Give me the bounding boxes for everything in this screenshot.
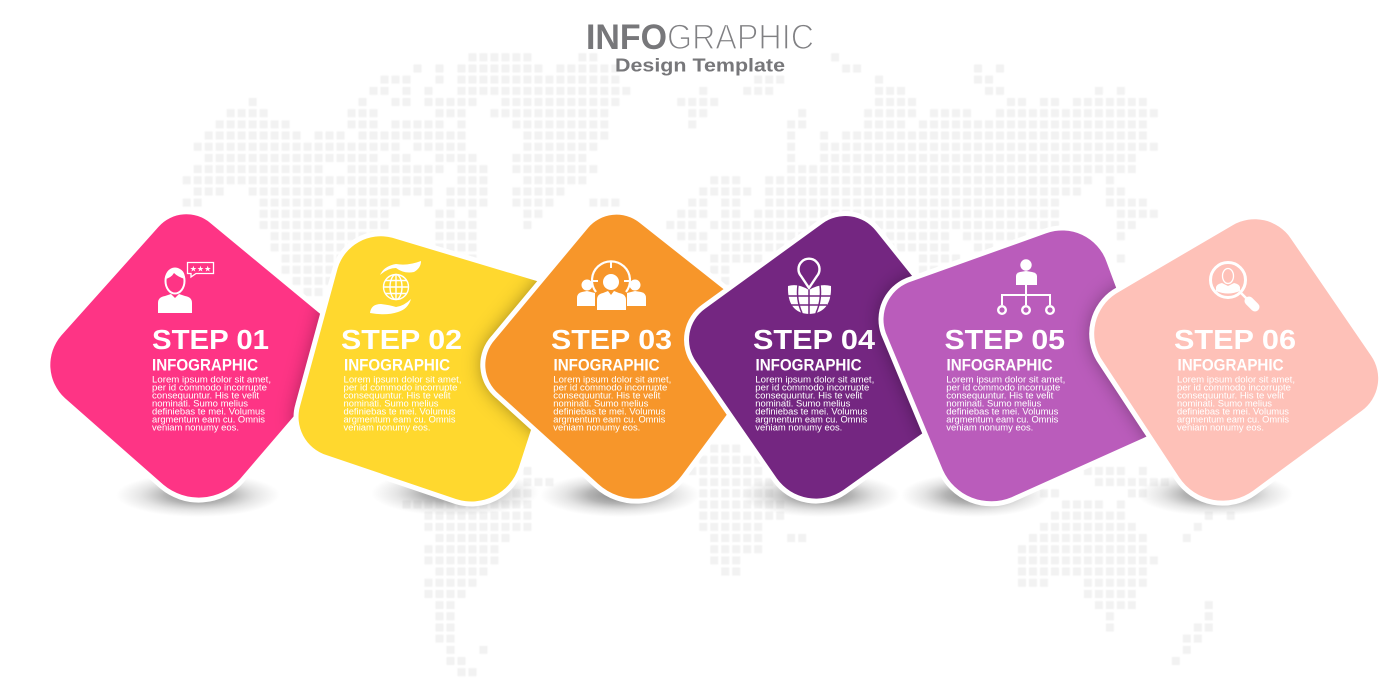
floor shadow (371, 470, 539, 516)
diamond shape (689, 216, 978, 499)
body text: definiebas te mei. Volumus (755, 407, 868, 417)
icon: magnifier on person (1210, 262, 1255, 307)
body text: argmentum eam cu. Omnis (344, 415, 456, 425)
body text: consequuntur. His te velit (152, 391, 260, 401)
body text: Lorem ipsum dolor sit amet, (553, 375, 671, 385)
body text: consequuntur. His te velit (946, 391, 1054, 401)
body text: per id commodo incorrupte (344, 383, 458, 393)
body text: veniam nonumy eos. (553, 423, 640, 433)
body text: consequuntur. His te velit (553, 391, 661, 401)
body text: Lorem ipsum dolor sit amet, (344, 375, 462, 385)
heading: STEP 05 (944, 324, 1065, 355)
body text: nominati. Sumo melius (1177, 399, 1273, 409)
subheading: INFOGRAPHIC (946, 357, 1053, 375)
panel: step 06 (1094, 219, 1378, 516)
body text: nominati. Sumo melius (553, 399, 649, 409)
body text: veniam nonumy eos. (152, 423, 239, 433)
subheading: INFOGRAPHIC (554, 357, 660, 375)
body text: definiebas te mei. Volumus (946, 407, 1059, 417)
body text: Lorem ipsum dolor sit amet, (755, 375, 874, 385)
rounded shape (299, 236, 568, 501)
icon: team target (577, 261, 646, 310)
body text: per id commodo incorrupte (152, 383, 267, 393)
panel: step 03 (470, 214, 727, 514)
diamond shape (1094, 219, 1378, 501)
body text: nominati. Sumo melius (755, 399, 851, 409)
panel: step 02 (299, 236, 568, 516)
heading: STEP 03 (551, 324, 672, 355)
body text: argmentum eam cu. Omnis (755, 415, 868, 425)
heading: STEP 02 (341, 324, 462, 355)
body text (755, 375, 874, 433)
body text: argmentum eam cu. Omnis (1177, 415, 1290, 425)
subheading: INFOGRAPHIC (344, 357, 450, 375)
icon: customer review (158, 262, 214, 313)
icon: hands holding globe (370, 261, 421, 314)
floor shadow (1137, 472, 1293, 516)
body text: argmentum eam cu. Omnis (152, 415, 266, 425)
body text (946, 375, 1065, 433)
body text: Lorem ipsum dolor sit amet, (1177, 375, 1295, 385)
diamond shape (485, 215, 773, 499)
body text: argmentum eam cu. Omnis (553, 415, 666, 425)
panel: step 04 (689, 216, 978, 517)
icon: customer review: ★★★ (190, 264, 211, 274)
body text: nominati. Sumo melius (152, 399, 249, 409)
icon: location pin on globe (788, 259, 831, 314)
shadow cast on step 04 (870, 270, 922, 438)
title (586, 18, 814, 76)
body text: veniam nonumy eos. (1177, 423, 1264, 433)
body text: veniam nonumy eos. (344, 423, 430, 433)
icon: organisation chart (998, 259, 1054, 314)
dotted world map (183, 57, 1238, 672)
body text: definiebas te mei. Volumus (1177, 407, 1290, 417)
shadow cast on step 01 (284, 307, 320, 426)
body text: definiebas te mei. Volumus (344, 407, 456, 417)
shadow cast on step 05 (1081, 280, 1146, 440)
heading: STEP 06 (1174, 324, 1296, 355)
body text (152, 375, 271, 433)
body text: per id commodo incorrupte (755, 383, 869, 393)
body text: per id commodo incorrupte (553, 383, 667, 393)
rounded shape (883, 230, 1159, 501)
body text (344, 375, 462, 433)
subheading: INFOGRAPHIC (152, 357, 258, 375)
title: INFO: INFO (586, 18, 667, 57)
floor shadow (901, 473, 1049, 517)
body text: veniam nonumy eos. (946, 423, 1033, 433)
body text: per id commodo incorrupte (1177, 383, 1291, 393)
panel: step 01 (50, 214, 343, 517)
body text: Lorem ipsum dolor sit amet, (946, 375, 1065, 385)
heading: STEP 04 (753, 324, 875, 355)
body text: definiebas te mei. Volumus (553, 407, 666, 417)
body text: Lorem ipsum dolor sit amet, (152, 375, 271, 385)
body text: definiebas te mei. Volumus (152, 407, 266, 417)
diamond shape (50, 214, 343, 498)
title: GRAPHIC: GRAPHIC (667, 18, 814, 57)
body text: nominati. Sumo melius (946, 399, 1042, 409)
body text: argmentum eam cu. Omnis (946, 415, 1059, 425)
subheading: INFOGRAPHIC (1178, 357, 1284, 375)
body text (553, 375, 671, 433)
floor shadow (540, 473, 700, 517)
body text: consequuntur. His te velit (1177, 391, 1285, 401)
panel: step 05 (883, 230, 1159, 517)
body text (1177, 375, 1295, 433)
floor shadow (116, 473, 280, 517)
body text: per id commodo incorrupte (946, 383, 1060, 393)
body text: nominati. Sumo melius (344, 399, 439, 409)
floor shadow (740, 473, 900, 517)
heading: STEP 01 (152, 324, 269, 355)
shadow cast on step 02 (470, 278, 537, 441)
subtitle: Design Template (615, 54, 785, 76)
body text: consequuntur. His te velit (755, 391, 863, 401)
subheading: INFOGRAPHIC (756, 357, 862, 375)
body text: consequuntur. His te velit (344, 391, 451, 401)
body text: veniam nonumy eos. (755, 423, 842, 433)
